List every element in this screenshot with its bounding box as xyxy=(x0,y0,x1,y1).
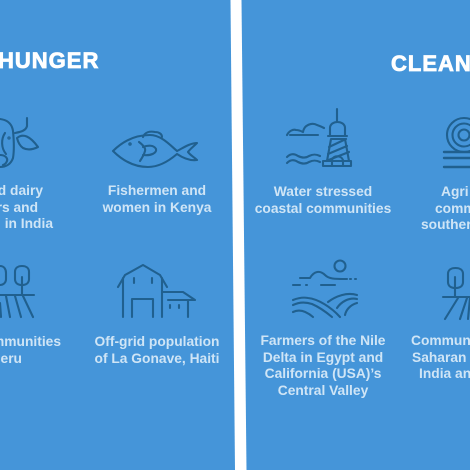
label: La Gonave xyxy=(95,334,219,366)
label: La Gonave: Off-grid population xyxy=(95,334,219,349)
label: sub-Saharan communities: Commun xyxy=(411,333,470,348)
label: dairy farmers: in India xyxy=(5,216,53,231)
label: Nile Delta farmers: Farmers of the Nile xyxy=(261,333,385,348)
heading: hunger: HUNGER xyxy=(0,48,99,73)
label: left communities in Peru: eru xyxy=(1,351,22,366)
label: sub-Saharan communities xyxy=(411,333,470,381)
label: agricultural communities: Agri xyxy=(441,184,469,199)
label: fishermen: women in Kenya xyxy=(103,200,211,215)
label: fishermen xyxy=(102,183,212,215)
label: fishermen: Fishermen and xyxy=(108,183,206,198)
label: coastal communities: Water stressed xyxy=(274,184,372,199)
heading: clean: CLEAN xyxy=(391,51,470,76)
label: coastal communities xyxy=(255,184,391,216)
label: Nile Delta farmers xyxy=(261,333,385,398)
label: Nile Delta farmers: California (USA)’s xyxy=(265,366,381,381)
label: sub-Saharan communities: Saharan xyxy=(412,350,466,365)
label: Nile Delta farmers: Delta in Egypt and xyxy=(263,350,383,365)
label: coastal communities: coastal communities xyxy=(255,201,391,216)
label: left communities in Peru xyxy=(0,334,61,366)
label: agricultural communities xyxy=(421,184,470,232)
label: La Gonave: of La Gonave, Haiti xyxy=(95,351,219,366)
label: sub-Saharan communities: India an xyxy=(419,366,470,381)
label: dairy farmers xyxy=(0,183,54,231)
label: Nile Delta farmers: Central Valley xyxy=(278,383,368,398)
